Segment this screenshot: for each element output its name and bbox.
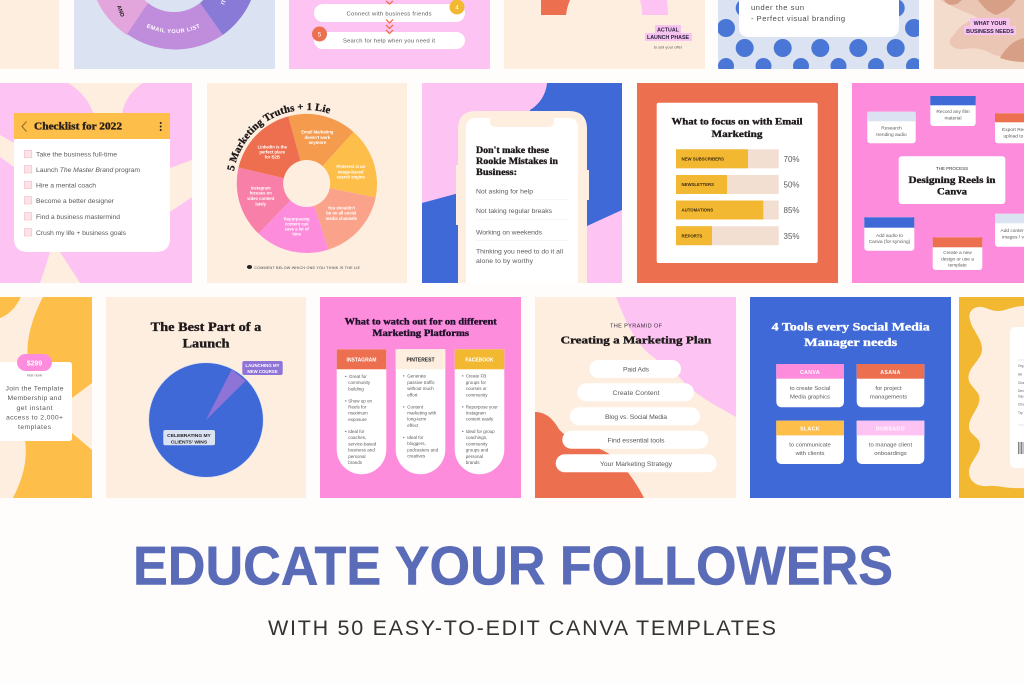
panel: polka dots card [717,0,923,74]
column: pinterest: passive traffic [407,380,435,385]
list items: Working on weekends [476,229,543,236]
heading: What to watch out for on different [345,317,498,327]
card text: - Perfect visual branding [751,14,845,23]
step card: research: trending audio [876,132,907,138]
yellow shapes [0,297,92,498]
body text: Membership and [8,395,62,402]
caption: to sell your offer [654,44,683,50]
label: launching my new course: NEW COURSE [247,369,278,374]
tool card: slack: with clients [795,451,824,457]
heading: Marketing [712,130,763,140]
column: pinterest: PINTEREST [406,358,435,364]
column: facebook: community [466,392,488,397]
column: pinterest: • [403,404,405,409]
heading: THE PYRAMID OF [610,323,663,329]
body text: access to 2,000+ [6,414,63,421]
wheel labels: media channels [326,216,358,221]
badge 4 [450,0,464,14]
white card [657,103,818,263]
checklist items: Hire a mental coach [36,182,96,190]
panel: checklist for 2022 [0,83,192,283]
wheel labels: save a lot of [285,227,309,232]
bar chart: AUTOMATIONS [682,208,713,212]
label: celebrating my clients' wins [163,430,215,446]
wheel labels: You shouldn't [328,205,356,210]
column: pinterest: effect [407,423,419,428]
tiny list text: Dev [1018,389,1024,393]
wheel labels: for B2B [265,155,280,160]
bar chart: 50% [784,180,800,189]
column: facebook: FACEBOOK [465,358,494,364]
heading [672,117,803,140]
bar chart: 35% [784,232,800,241]
column: facebook: Create FB [466,374,486,379]
wheel labels: image-based [338,169,364,174]
step card: create design [933,237,982,270]
tool card: dubsado: to manage client [869,443,912,449]
panel: template membership [0,297,92,498]
checklist items: Find a business mastermind [36,214,120,221]
panel: the best part of a launch [106,297,306,498]
panel: 5 marketing truths + 1 lie [207,83,407,283]
column: facebook: Instagram [466,410,486,416]
column: facebook: Repurpose your [466,404,498,409]
column: instagram: Show up on [348,398,373,403]
column: instagram: brands [348,460,363,465]
photo detail: hair [944,0,1024,62]
pyramid labels: Create Content [612,390,660,397]
arrows: chevrons [386,1,393,34]
wheel labels [247,130,365,237]
list items [476,188,563,265]
column: pinterest [396,349,445,474]
column: pinterest: • [403,374,405,379]
bar chart [676,149,800,245]
panel: launch phase fragment [504,0,705,69]
checklist items: Become a better designer [36,198,115,205]
wheel labels: time [292,232,302,237]
tiny list text: Cho [1018,402,1024,406]
card body [14,125,170,252]
heading: What to focus on with Email [672,117,803,127]
tool card: canva: Media graphics [790,394,830,400]
heading: Manager needs [804,337,898,349]
column: instagram: • [345,374,347,379]
panel: steps fragment [289,0,490,69]
column: facebook: personal [466,454,483,459]
tiny list text: Org [1018,364,1024,368]
heading: Launch [182,336,230,350]
column: instagram: business and [348,448,375,453]
price pill [17,354,52,371]
wheel labels: doesn't work [304,135,331,140]
panel: pyramid marketing plan [535,297,736,498]
checklist items: Take the business full-time [36,152,117,158]
center card text: Canva [937,187,967,197]
card text: under the sun [751,3,804,12]
heading: Checklist for 2022 [34,122,122,133]
center card text: THE PROCESS [936,166,968,171]
wheel labels: Repurposing [284,217,310,222]
column: facebook: community [466,441,488,446]
column: facebook: content easily [466,417,494,422]
subtitle: WITH 50 EASY-TO-EDIT CANVA TEMPLATES [268,616,776,640]
column: pinterest: without much [407,386,434,391]
column: facebook: groups for [466,380,486,385]
column: pinterest: long-term [407,417,427,422]
heading [561,323,712,346]
tool card: asana: managements [870,394,907,400]
tiny list text: Imp [1018,394,1024,398]
tiny list text [1018,364,1024,415]
pie wheel [237,114,377,253]
body text: templates [18,424,52,431]
tool card: canva: CANVA [800,370,820,376]
panel: donut wheel fragment [74,0,275,69]
label: actual launch phase: LAUNCH PHASE [647,35,690,41]
step card: add audio: Add audio to [876,233,903,239]
panel: rookie mistakes phone [422,83,622,290]
bar chart: 85% [784,206,800,215]
column: pinterest: effort [407,392,418,397]
panel: 4 tools [750,297,951,498]
step card: export [995,113,1024,143]
label: what your business needs: WHAT YOUR [974,21,1006,27]
wheel labels: Pinterest is an [336,164,365,169]
tool card: slack: to communicate [789,443,832,449]
label: what your business needs: BUSINESS NEEDS [966,29,1014,35]
step pill: connect with business friends [314,4,465,22]
label: actual launch phase: ACTUAL [657,28,680,34]
arc segment: orange [541,0,570,15]
wheel label: partial left: AND [115,5,125,18]
panel: marketing platforms [320,297,521,498]
column: instagram: Reels for [348,404,367,410]
checklist items: Crush my life + business goals [36,230,127,237]
wheel label: email your list: EMAIL YOUR LIST [146,24,199,34]
list items: Not taking regular breaks [476,208,553,215]
step card: record: Record any film [936,109,970,115]
wavy cream blob [968,306,1024,488]
column: facebook: • [462,374,464,379]
bar chart: NEWSLETTERS [682,182,714,187]
checkboxes [24,150,32,236]
wheel labels: focuses on [250,191,272,196]
tiny list text: Cha [1018,381,1024,385]
pink shape [616,297,736,417]
heading: Creating a Marketing Plan [561,335,712,346]
polka dots [717,0,923,74]
label: launching my new course: LAUNCHING MY [245,363,280,368]
comment prompt: COMMENT BELOW WHICH ONE YOU THINK IS THE LIE [254,266,361,270]
phone side buttons [456,165,589,225]
tool card: canva: to create Social [790,386,830,392]
heading [151,320,262,350]
phone screen [466,118,578,290]
step card: add audio: Canva (for syncing) [869,239,911,245]
column: pinterest: podcasters and [407,447,439,452]
wheel labels: lately [255,201,267,206]
step text: connect: Connect with business friends [346,12,432,18]
list items: Thinking you need to do it all [476,248,563,255]
pyramid labels: Blog vs. Social Media [605,414,667,421]
step card: add content [995,214,1024,247]
panel: designing reels in canva [852,83,1024,283]
checklist items: Launch The Master Brand program [36,167,140,174]
list items: Not asking for help [476,188,533,195]
heading [476,145,558,177]
heading [345,317,498,338]
wheel labels: LinkedIn is the [258,145,288,150]
column: pinterest: Generate [407,374,427,379]
divider lines [1018,360,1024,425]
photo blob [941,0,1024,62]
card header [14,113,170,139]
pyramid pills [556,360,717,472]
wheel labels: content can [285,222,309,227]
menu dots [160,122,162,131]
blue shapes [422,83,622,283]
column: facebook: coachings, [466,435,487,440]
column: instagram: personal [348,454,366,459]
step card: add audio [864,217,914,251]
price: $299 [27,360,42,368]
white card [0,362,72,441]
per year: PER YEAR [27,374,43,378]
step card: record: material [944,115,962,121]
column: pinterest: creatives [407,454,426,459]
step card: export: upload to [1004,134,1024,140]
pyramid labels: Find essential tools [608,437,665,444]
column: instagram: service-based [348,441,377,446]
label: what your business needs [966,21,1014,33]
body text [6,386,64,431]
pyramid labels: Paid Ads [623,366,650,374]
label: celebrating my clients' wins: CELEBRATING MY [167,433,212,439]
background shapes [0,83,192,283]
label: launching my new course [242,361,283,375]
column: instagram: coaches, [348,435,366,440]
barcode [1018,442,1023,454]
column: instagram: maximum [348,411,368,416]
tiny list text: Try [1018,411,1023,415]
wheel labels: Email Marketing [301,130,334,135]
column: pinterest: marketing with [407,410,437,416]
badge 5 [312,26,327,42]
label highlight [645,25,692,41]
heading: Marketing Platforms [372,328,470,338]
badge 4: 4 [455,6,459,12]
column: instagram: Ideal for [348,429,365,434]
column: pinterest: Content [407,404,424,409]
column: instagram: Great for [349,374,367,379]
column: instagram: • [345,429,347,434]
column: pinterest: Ideal for [407,435,424,440]
column: pinterest: • [403,435,405,440]
center card text [908,166,996,197]
column: facebook: groups and [466,448,489,453]
wheel labels: be on all social [326,211,356,216]
bar chart: NEW SUBSCRIBERS [682,156,724,162]
white card [739,0,899,37]
body text: Join the Template [6,386,64,393]
wheel labels: search engine [337,175,365,180]
card text [751,4,845,22]
wheel labels: anymore [309,140,327,145]
title: EDUCATE YOUR FOLLOWERS [133,534,893,596]
pyramid labels: Your Marketing Strategy [600,461,673,468]
panel: photo fragment [934,0,1024,69]
tool card: dubsado: DUBSADO [876,426,905,432]
column: instagram: exposure [348,417,367,422]
step card: add content: images / v [1002,234,1024,240]
wheel labels: Instagram [251,186,271,191]
checklist items [36,152,140,237]
column: facebook: brands [466,460,480,465]
curved title: 5 Marketing Truths + 1 Lie [227,102,330,171]
column: pinterest: bloggers, [407,441,426,446]
tool card: canva [776,364,844,407]
heading: Rookie Mistakes in [476,156,558,166]
white card [1010,327,1024,468]
heading: Business: [476,167,517,177]
column: facebook: • [462,429,464,434]
pie chart [149,363,263,477]
tool card: asana: ASANA [880,370,901,376]
heading: Don't make these [476,145,549,155]
label highlight [964,18,1016,35]
panel: wavy checklist fragment [959,297,1024,498]
wheel labels: video content [247,196,275,201]
tool card: asana: for project [875,386,902,392]
step text: search: Search for help when you need it [343,38,435,44]
icon: comment bubble [247,265,252,269]
column: facebook: • [462,404,464,409]
column: instagram: community [348,380,371,385]
column: instagram: • [345,398,347,403]
panel: top cream fragment [0,0,59,69]
bar chart: 70% [784,155,800,164]
column: facebook: Ideal for group [466,429,495,434]
column: facebook [455,349,504,474]
orange shape [535,412,644,498]
tiny list text: Ad [1018,372,1022,376]
step card: research: Research [881,126,902,132]
step card: create design: template [948,262,967,268]
heading: The Best Part of a [151,320,262,334]
tool card: dubsado [857,421,924,464]
tool card: dubsado: onboardings [874,451,907,457]
column: facebook: courses or [466,386,487,391]
phone body [458,111,587,290]
bar chart: REPORTS [682,234,702,238]
tool card: slack: SLACK [800,426,820,432]
arc segment: pink [640,0,668,15]
column: instagram: INSTAGRAM [347,358,376,364]
label: actual launch phase [647,28,690,41]
column: instagram: building [348,386,364,391]
pyramid labels [600,366,673,468]
tool card: slack [776,421,844,464]
heading [772,322,930,349]
column: instagram [337,349,386,474]
badge 5: 5 [318,32,322,38]
step card: record [930,96,976,126]
list items: alone to by worthy [476,258,534,265]
phone notch [490,118,554,127]
step card: research [867,112,916,143]
step pill: search for help [314,32,465,49]
wheel labels: perfect place [259,150,286,155]
back arrow [22,122,26,132]
tool card: asana [857,364,924,407]
body text: get instant [16,405,53,412]
step card: create design: design or use a [941,256,974,262]
panel: email marketing focus [637,83,838,283]
step card: create design: Create a new [943,250,972,256]
center card [899,156,1005,204]
center card text: Designing Reels in [908,176,996,186]
label: celebrating my clients' wins: CLIENTS' WINS [171,440,208,446]
heading: 4 Tools every Social Media [772,322,930,334]
